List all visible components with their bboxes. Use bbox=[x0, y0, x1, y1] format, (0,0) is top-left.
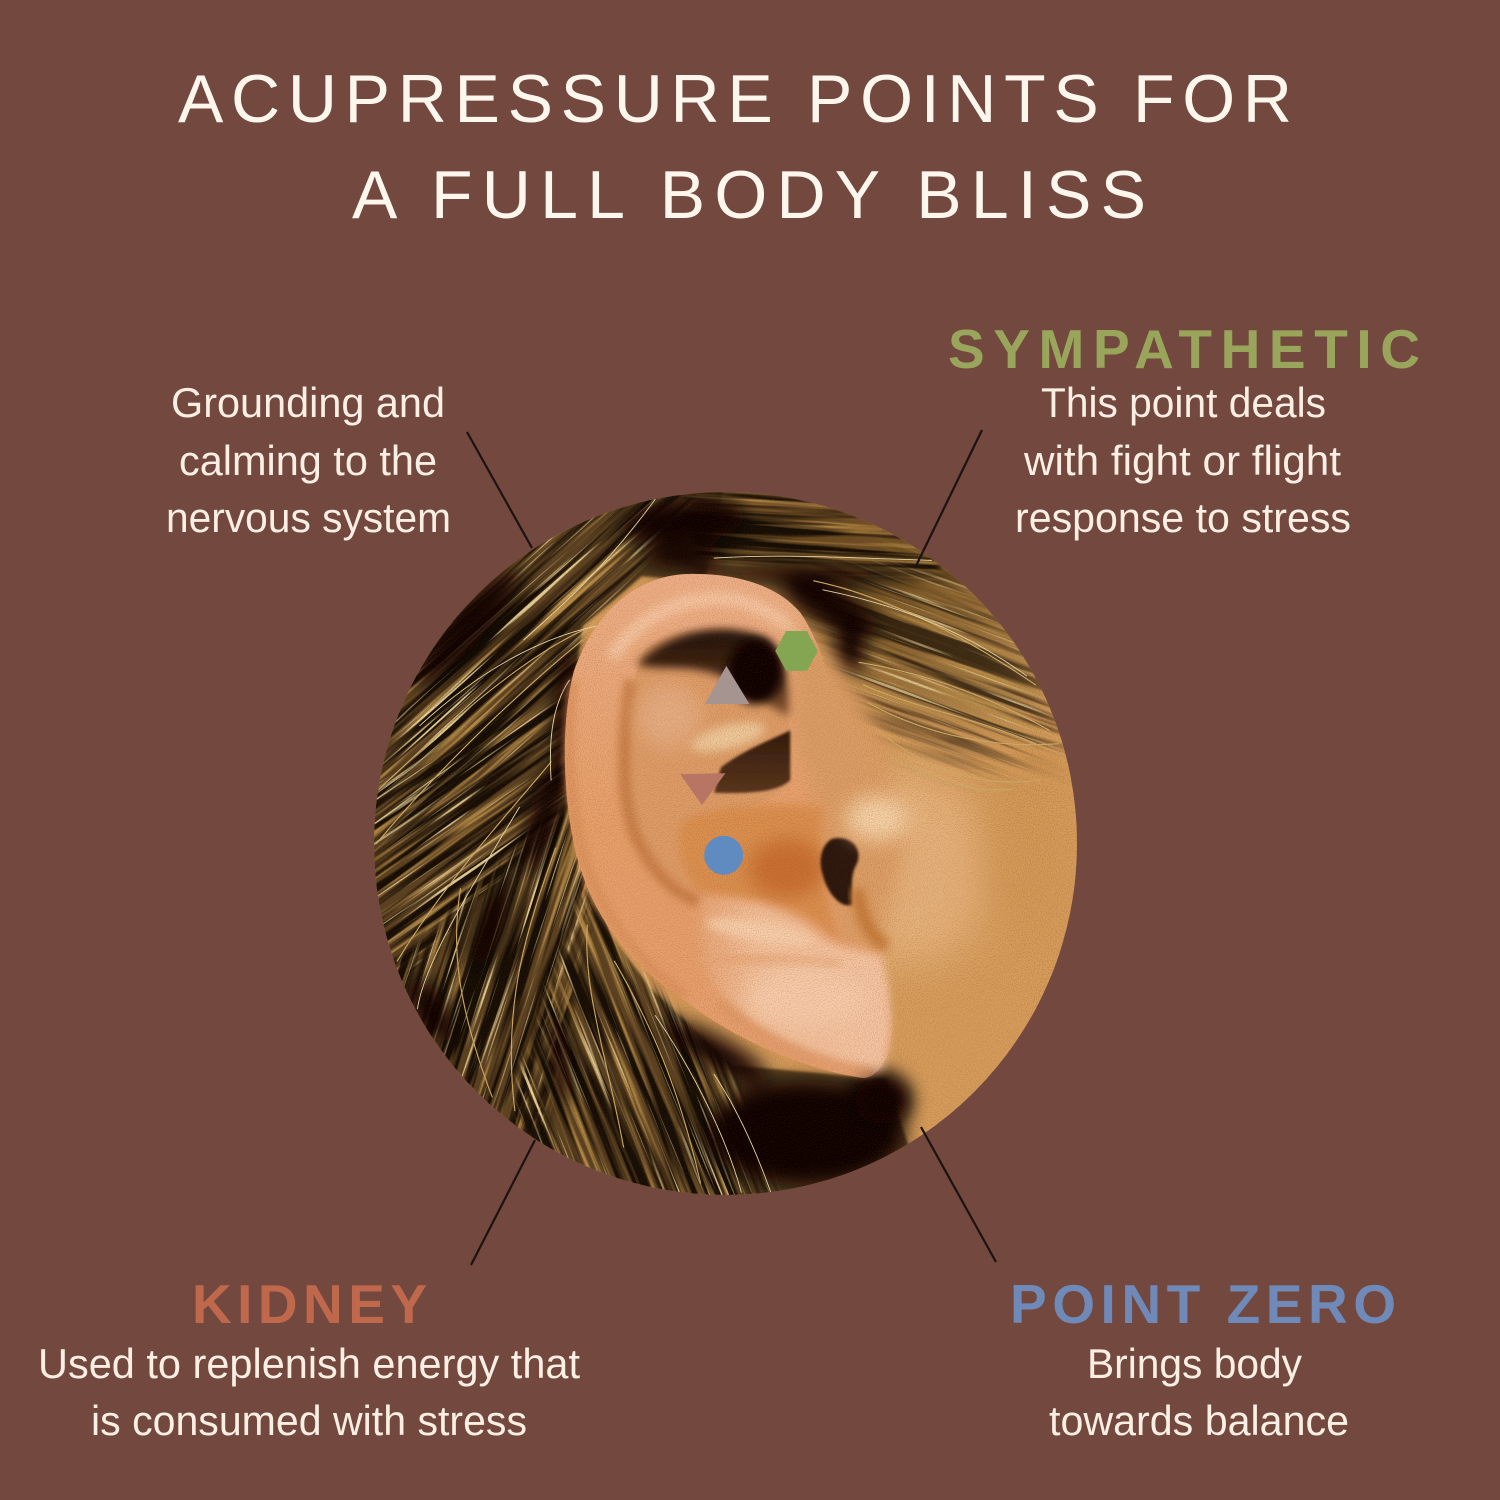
hair strand texture: lower left bbox=[394, 800, 592, 1144]
text block: kidney description bbox=[38, 1340, 580, 1444]
skin grain bbox=[370, 490, 1081, 1201]
ear photo circle bbox=[374, 492, 1077, 1195]
neck shadow under lobe bbox=[855, 1079, 909, 1124]
hair strand texture: top bbox=[687, 492, 945, 583]
rim shading bbox=[569, 680, 687, 997]
hair strands: pale highlights bbox=[418, 499, 1027, 1192]
antihelix ridge bbox=[688, 716, 768, 758]
text block: point zero description: towards balance bbox=[1049, 1397, 1349, 1444]
skin base bbox=[370, 490, 1081, 1201]
icon: terracotta inverted triangle bbox=[680, 773, 726, 805]
heading: point zero: POINT ZERO bbox=[1010, 1273, 1396, 1335]
title bbox=[178, 61, 1292, 233]
tragus highlight bbox=[846, 796, 909, 841]
text block: sympathetic description: response to stress bbox=[1015, 494, 1351, 541]
text block: point zero description bbox=[1049, 1340, 1349, 1444]
hair base left bbox=[370, 490, 927, 1201]
hair strand texture: upper right bbox=[795, 548, 1065, 780]
connector line: top left bbox=[467, 432, 532, 548]
title: A FULL BODY BLISS bbox=[352, 157, 1146, 233]
connector line: bottom right bbox=[921, 1127, 996, 1262]
text block: grounding point description: Grounding and bbox=[171, 379, 445, 426]
hair strand texture: middle left bbox=[374, 699, 568, 978]
ear outer shape bbox=[565, 574, 892, 1078]
icon: grey triangle bbox=[705, 666, 750, 704]
text block: grounding point description: calming to the bbox=[179, 437, 437, 484]
dark hair areas bbox=[399, 493, 923, 1185]
ear canal bbox=[821, 838, 859, 905]
text block: grounding point description: nervous system bbox=[166, 494, 451, 541]
text block: point zero description: Brings body bbox=[1087, 1340, 1302, 1387]
text block: sympathetic description: This point deals bbox=[1041, 379, 1326, 426]
helix root blending into face bbox=[789, 626, 904, 947]
text block: sympathetic description bbox=[1015, 379, 1351, 541]
helix highlight bbox=[615, 599, 796, 653]
text block: sympathetic description: with fight or flight bbox=[1023, 437, 1341, 484]
text block: grounding point description bbox=[166, 379, 451, 541]
hair base top right bbox=[660, 490, 1054, 721]
inner rim shadow bbox=[624, 680, 701, 902]
text block: kidney description: Used to replenish energy that bbox=[38, 1340, 580, 1387]
hair strand texture: upper left bbox=[374, 494, 696, 852]
lower dark wedge bbox=[714, 730, 790, 793]
hair strand texture: bottom bbox=[514, 886, 778, 1195]
concha bbox=[679, 804, 841, 943]
earlobe bbox=[700, 898, 890, 1072]
heading: sympathetic: SYMPATHETIC bbox=[948, 318, 1420, 380]
scapha inner hollow bbox=[625, 628, 790, 898]
icon: green hexagon bbox=[775, 631, 818, 671]
hair strands: golden bbox=[377, 581, 1058, 1183]
upper dark hollow bbox=[637, 629, 789, 716]
connector line: bottom left bbox=[471, 1140, 535, 1265]
text block: kidney description: is consumed with stress bbox=[91, 1397, 527, 1444]
title: ACUPRESSURE POINTS FOR bbox=[178, 61, 1292, 137]
icon: blue circle bbox=[704, 836, 743, 874]
connector line: top right bbox=[915, 430, 982, 568]
heading: kidney: KIDNEY bbox=[192, 1273, 427, 1335]
